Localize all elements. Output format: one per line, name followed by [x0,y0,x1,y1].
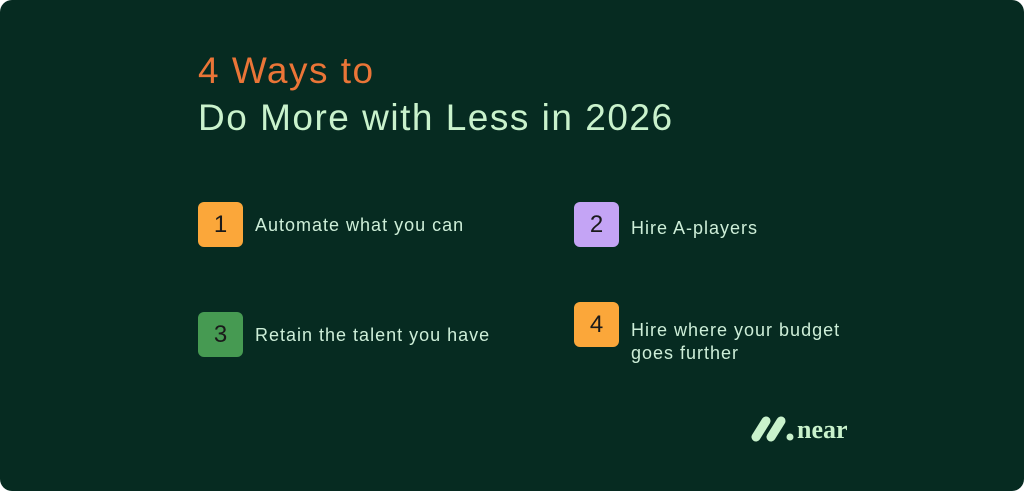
label 4: Hire where your budget [631,320,840,340]
badge 4 [574,302,619,347]
title line 1: 4 Ways to [198,50,375,91]
item 2 [574,202,758,247]
label 4 [631,320,840,363]
item 1 [198,202,464,247]
badge 3 [198,312,243,357]
badge 1 [198,202,243,247]
badge 2: 2 [590,211,603,238]
item 4 [574,302,840,363]
title line 2: Do More with Less in 2026 [198,97,674,138]
badge 4: 4 [590,311,603,338]
logo: near [752,415,848,444]
badge 3: 3 [214,321,227,348]
label 1: Automate what you can [255,215,464,235]
badge 1: 1 [214,211,227,238]
label 2: Hire A-players [631,218,758,238]
label 4: goes further [631,343,739,363]
label 3: Retain the talent you have [255,325,490,345]
item 3 [198,312,490,357]
logo: near: near [797,415,848,444]
badge 2 [574,202,619,247]
